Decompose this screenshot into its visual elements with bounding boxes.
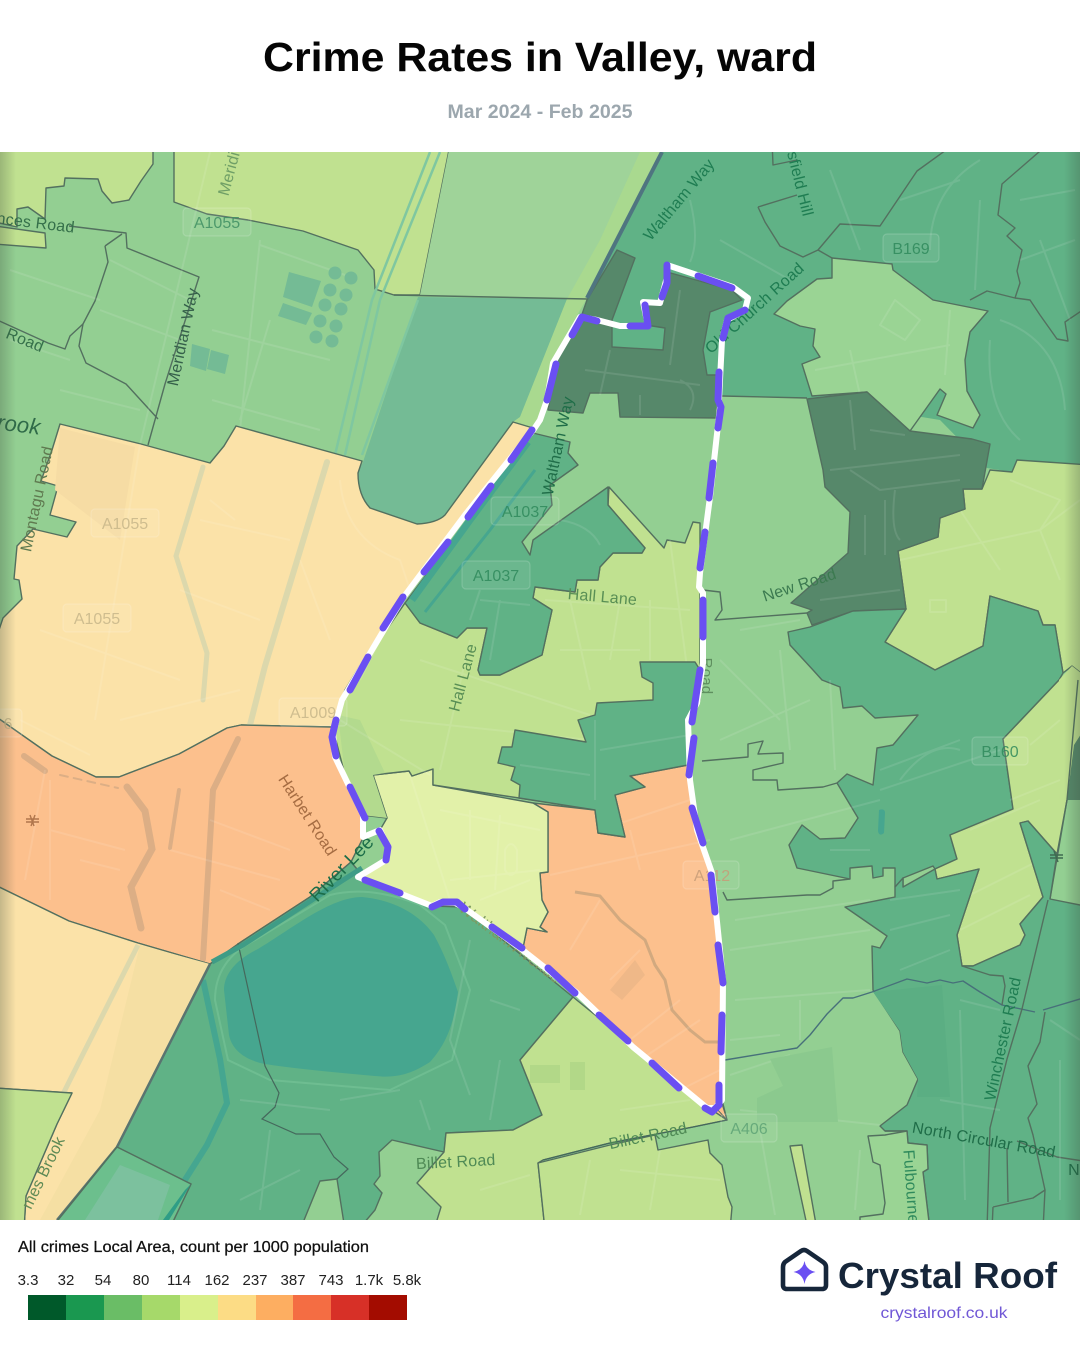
area: east mid green: [788, 596, 1063, 887]
road and water labels: Harbet Road: [274, 772, 339, 859]
road and water labels: Meridian Way: [165, 287, 202, 388]
area: ward pale lime: [358, 769, 548, 948]
road shields: 6: [4, 716, 13, 733]
road and water labels: Road: [3, 326, 46, 356]
logo: Crystal Roof: [783, 1250, 1058, 1322]
area: north-east light green island: [774, 258, 988, 431]
area: marsh north: [420, 152, 640, 298]
area: north-west pale green: [174, 140, 451, 295]
website link: crystalroof.co.uk: [880, 1305, 1009, 1322]
area: south-east mid green: [845, 821, 1080, 1230]
road line: billet road: [543, 1120, 727, 1160]
road and water labels: Billet Road: [607, 1120, 689, 1153]
road shields: A1009: [290, 705, 336, 722]
river line north: [587, 152, 662, 298]
road and water labels: River Lee: [306, 832, 378, 906]
area: south pale green: [417, 997, 727, 1230]
road and water labels: New Road: [761, 566, 839, 606]
road and water labels: Waltham Way: [540, 395, 577, 497]
area: north-east mid green: [587, 140, 1080, 472]
road shields: A1055: [194, 215, 240, 232]
legend scale labels: 80: [133, 1272, 149, 1289]
logo wordmark: Crystal Roof: [838, 1255, 1058, 1296]
icon: rail station symbols: [26, 815, 39, 826]
ward boundary: Valley: [332, 265, 748, 1112]
legend colour swatches: [28, 1295, 407, 1320]
area: east pale band: [935, 680, 1077, 966]
road shields: B160: [981, 744, 1019, 761]
legend scale labels: 5.8k: [393, 1272, 422, 1289]
subtitle: date range: Mar 2024 - Feb 2025: [448, 102, 633, 123]
area: reservoir north: [358, 297, 567, 524]
road and water labels: Waltham Way: [641, 156, 718, 244]
title: Crime Rates in Valley, ward: [263, 34, 817, 80]
area: south-west lake: [58, 1146, 192, 1220]
area: north-centre dark: [548, 250, 742, 418]
road and water labels: Montagu Road: [18, 445, 57, 553]
legend scale labels: 387: [280, 1272, 306, 1289]
icon: house with star: [783, 1250, 826, 1289]
legend scale labels: 1.7k: [355, 1272, 384, 1289]
area: north-west boundaries and streets: [0, 226, 199, 445]
map edge shading: [0, 152, 1080, 1220]
area: ward pale green main: [332, 487, 700, 818]
road shields: B169: [892, 241, 930, 258]
legend scale labels: 237: [242, 1272, 268, 1289]
area: south-west pale yellow: [0, 885, 210, 1230]
road shields: A1037: [502, 504, 548, 521]
legend scale labels: 32: [58, 1272, 74, 1289]
road and water labels: Fulbourne: [899, 1149, 922, 1224]
road and water labels: Old Church Road: [702, 260, 808, 357]
area: east pale green: [885, 460, 1080, 680]
road shields: A1055: [102, 516, 148, 533]
icon: water works tanks: [190, 266, 358, 374]
legend scale labels: [18, 1272, 422, 1289]
legend scale labels: 162: [204, 1272, 230, 1289]
rail and water channels: [335, 152, 440, 455]
area: south-east streets and strips: [789, 1144, 816, 1220]
road and water labels: sfield Hill: [783, 150, 816, 218]
legend scale labels: 114: [167, 1272, 191, 1289]
road shields: A112: [694, 868, 730, 885]
road and water labels: Hall Lane: [567, 586, 638, 609]
legend scale labels: 743: [318, 1272, 344, 1289]
road and water labels: Hall Lane: [446, 642, 481, 714]
road and water labels: Billet Road: [416, 1152, 496, 1173]
road and water labels: N: [1068, 1162, 1080, 1179]
road and water labels: Waltham Avenue: [456, 900, 564, 987]
area: river bank strip: [513, 152, 662, 428]
area: ward teal green: [405, 433, 645, 675]
legend scale labels: 54: [95, 1272, 111, 1289]
road and water labels: mes Brook: [19, 1133, 69, 1212]
river channel: [183, 980, 227, 1183]
area: south-west pale green: [0, 1088, 72, 1230]
area: west orange: [0, 716, 362, 964]
area: ward mid green centre: [498, 662, 700, 837]
road shields: [0, 208, 1028, 1142]
road shields: A1055: [74, 611, 120, 628]
area: ward orange: [523, 765, 727, 1120]
area: reservoir south: [224, 897, 458, 1077]
area: east dark: [791, 392, 990, 625]
legend scale labels: 3.3: [18, 1272, 38, 1289]
road shields: A406: [730, 1121, 768, 1138]
road and water labels: Meridi: [216, 150, 244, 198]
area: south green with reservoir: [117, 862, 573, 1230]
road and water labels: North Circular Road: [911, 1120, 1057, 1162]
legend: [18, 1239, 422, 1320]
road shields: A1037: [473, 568, 519, 585]
area: west pale yellow: [0, 422, 533, 777]
road and water labels: [0, 150, 1080, 1224]
area: ward southern tip: [718, 1105, 726, 1118]
road and water labels: Road: [698, 658, 715, 694]
road and water labels: Winchester Road: [982, 976, 1025, 1102]
legend title: All crimes Local Area, count per 1000 population: [18, 1239, 369, 1256]
